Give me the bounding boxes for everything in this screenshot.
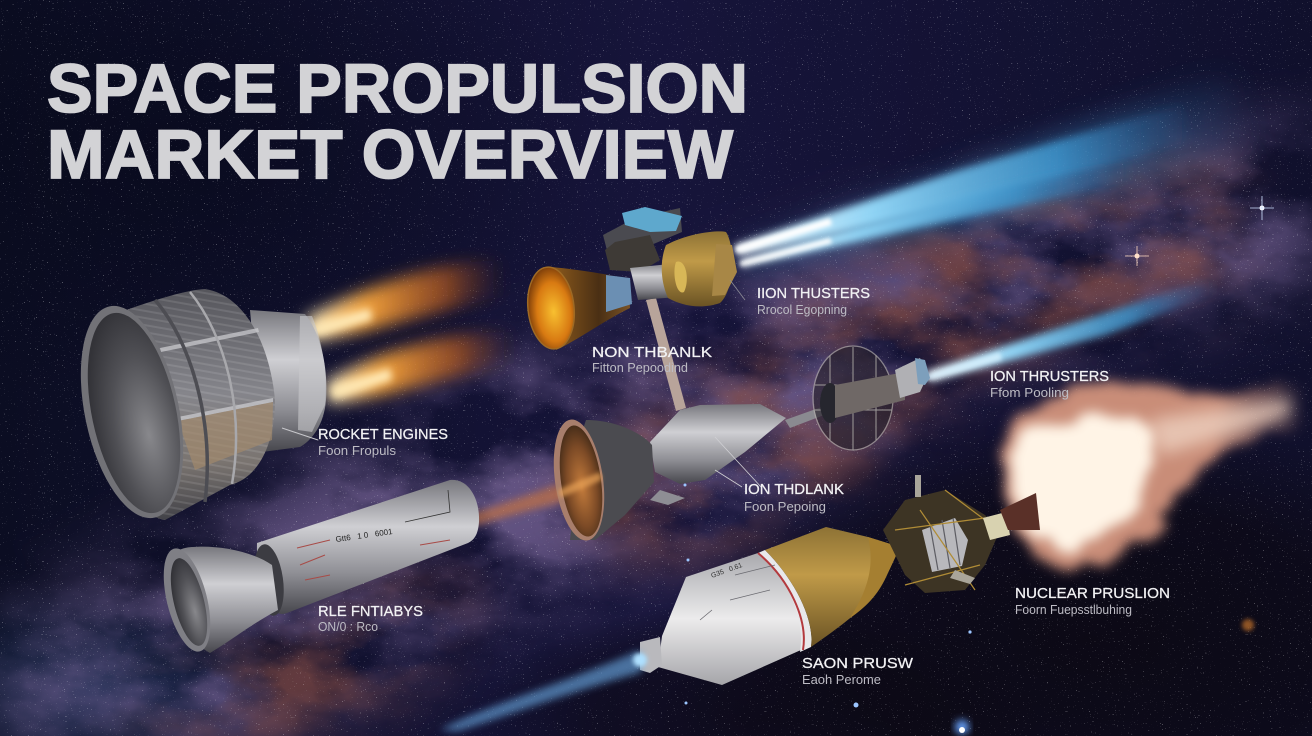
label: rle fntiabys [318, 604, 423, 634]
rocket engine (large grey) [64, 289, 326, 527]
faint exhaust behind tank [470, 470, 605, 525]
upper ion thruster assembly [524, 207, 745, 411]
label: rocket engines: Foon Fropuls [318, 444, 396, 458]
label: non thbanlk [592, 345, 712, 375]
label: ion thusters [757, 286, 870, 317]
central silver body with copper nozzle [547, 404, 786, 544]
gold and silver tank: G35 0.61 [710, 562, 744, 580]
second ion plume [925, 278, 1218, 382]
label: ion thdlank: Foon Pepoing [744, 500, 826, 514]
title: MARKET OVERVIEW [47, 116, 734, 193]
nuclear exhaust plume [1004, 384, 1305, 569]
label: nuclear pruslion: Foorn Fuepsstlbuhing [1015, 603, 1132, 617]
label: saon prusw [802, 656, 913, 687]
label: rle fntiabys: RLE FNTIABYS [318, 604, 423, 620]
label: rocket engines [318, 427, 448, 458]
title: SPACE PROPULSION [47, 50, 748, 127]
label: saon prusw: SAON PRUSW [802, 656, 913, 672]
label: ion thrusters right: Ffom Pooling [990, 386, 1069, 400]
label: ion thrusters right [990, 369, 1109, 400]
ion thruster ring assembly [785, 346, 930, 450]
label: rle fntiabys: ON/0 : Rco [318, 620, 378, 634]
label: ion thdlank: ION THDLANK [744, 482, 844, 498]
label: ion thusters: Rrocol Egopning [757, 303, 847, 317]
label: ion thdlank [744, 482, 844, 514]
cylinder tank with nozzle: Gtt6 1 0 6001 [335, 527, 394, 544]
label: ion thusters: IION THUSTERS [757, 286, 870, 302]
large ion plume [735, 75, 1260, 267]
label: saon prusw: Eaoh Perome [802, 673, 881, 687]
stars [684, 196, 1274, 734]
title [47, 50, 748, 193]
label: rocket engines: ROCKET ENGINES [318, 427, 448, 443]
label: nuclear pruslion: NUCLEAR PRUSLION [1015, 586, 1170, 602]
label: non thbanlk: NON THBANLK [592, 345, 712, 361]
gold and silver tank [640, 527, 900, 685]
label: non thbanlk: Fitton Pepoodind [592, 361, 688, 375]
nuclear engine module [883, 475, 1040, 593]
label: nuclear pruslion [1015, 586, 1170, 617]
label: ion thrusters right: ION THRUSTERS [990, 369, 1109, 385]
cylinder tank with nozzle [155, 480, 479, 656]
blue exhaust from tank [440, 650, 647, 731]
orange plumes of rocket engine [305, 260, 515, 404]
